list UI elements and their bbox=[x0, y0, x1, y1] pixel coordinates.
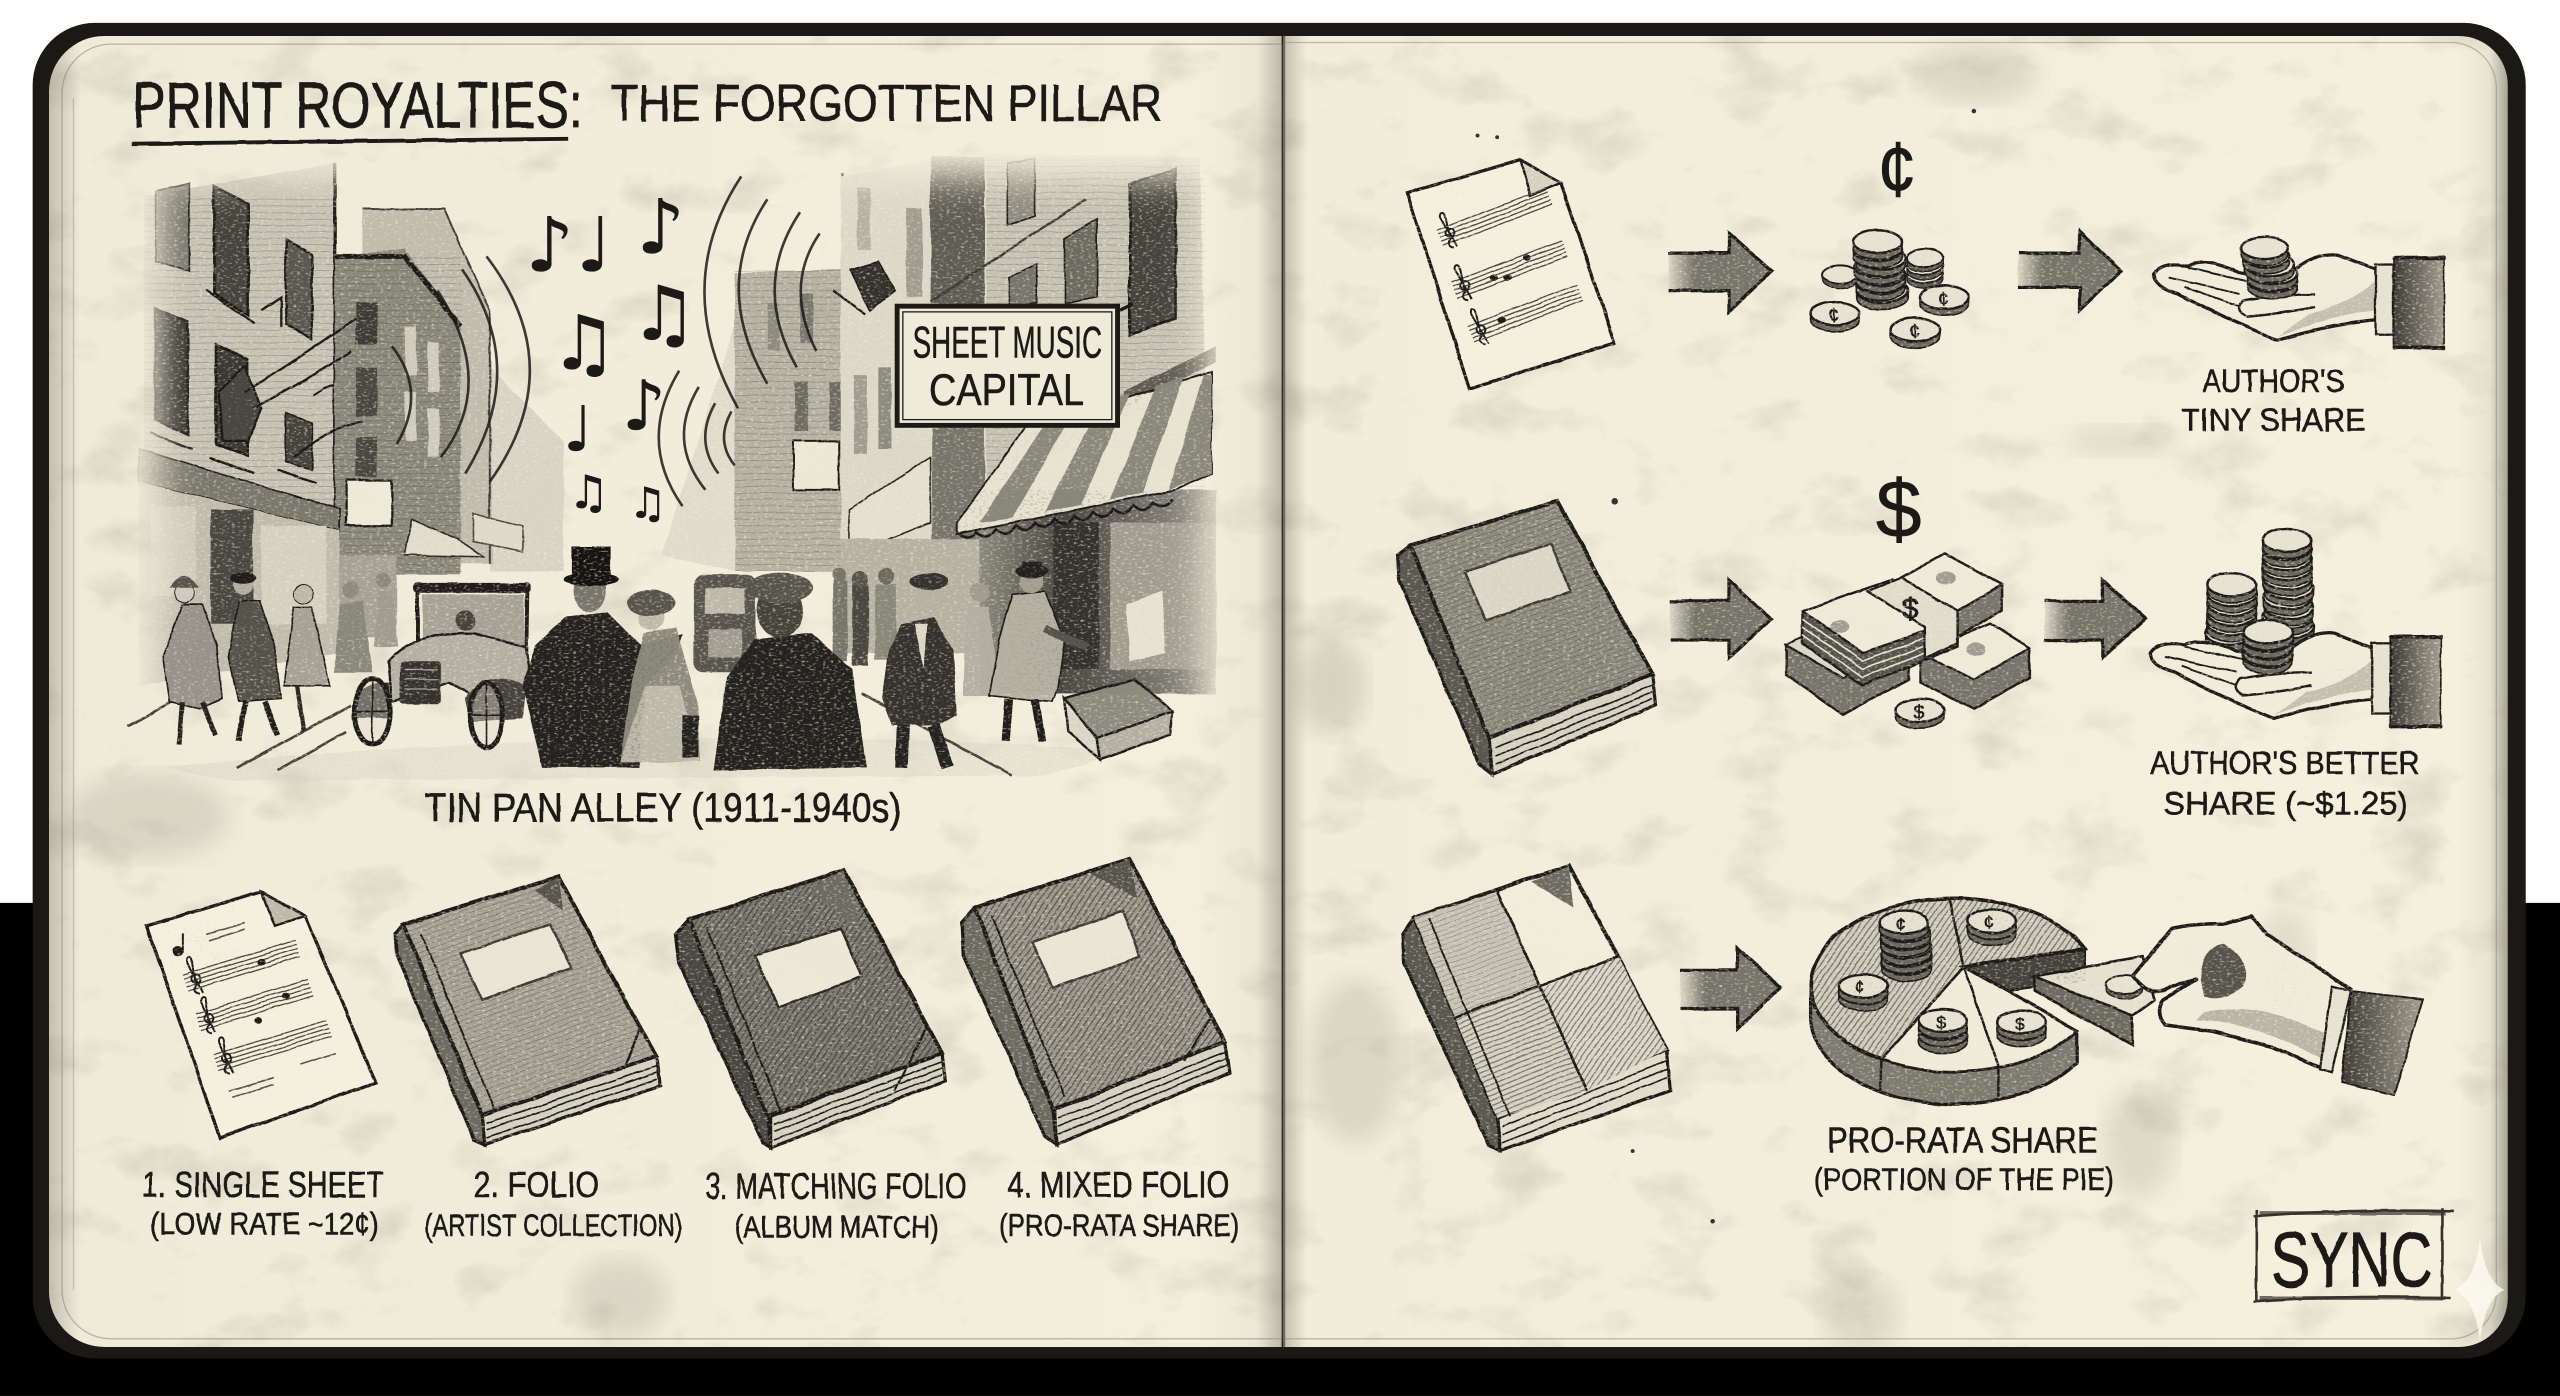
right page bbox=[1285, 36, 2508, 1347]
flow 2: folio to better share bbox=[1398, 464, 2442, 822]
labels: print types: (ARTIST COLLECTION) bbox=[424, 1208, 682, 1243]
street ground bbox=[127, 694, 1127, 780]
sound waves bbox=[392, 176, 820, 506]
icon: money stacks: $ bbox=[1902, 593, 1918, 626]
sign: Sheet Music Capital: SHEET MUSIC bbox=[913, 319, 1102, 368]
music notes: ♩ bbox=[576, 201, 612, 289]
sparkle watermark bbox=[2454, 1238, 2504, 1342]
black backdrop bbox=[0, 903, 2560, 1396]
left page bbox=[49, 36, 1282, 1347]
icon: money stacks bbox=[1786, 554, 2029, 715]
labels: print types: (PRO-RATA SHARE) bbox=[999, 1208, 1239, 1243]
labels: print types: 4. MIXED FOLIO bbox=[1007, 1164, 1229, 1205]
illustration: Tin Pan Alley street scene bbox=[127, 154, 1216, 780]
sign: Sheet Music Capital bbox=[895, 304, 1133, 428]
label: pro-rata share: (PORTION OF THE PIE) bbox=[1814, 1162, 2114, 1197]
music notes: ♫ bbox=[568, 466, 609, 519]
music notes: ♪ bbox=[526, 201, 574, 289]
label: author's better share bbox=[2150, 744, 2420, 822]
icon: folio book bbox=[395, 877, 660, 1145]
icon: single sheet bbox=[147, 891, 376, 1138]
icon: sheet music bbox=[1407, 160, 1615, 389]
icon: coin with dollar bbox=[1896, 699, 1944, 728]
pie coins: ¢ bbox=[1984, 911, 1994, 931]
arrow bbox=[2018, 232, 2121, 310]
vintage car bbox=[353, 583, 532, 748]
music notes bbox=[526, 183, 698, 529]
figure: suited man bbox=[882, 573, 957, 767]
icon: gramophone speaker left bbox=[219, 261, 895, 457]
arrow bbox=[1669, 234, 1771, 312]
crowd on the right bbox=[832, 567, 999, 696]
figure: man with cap bbox=[713, 573, 867, 771]
label: pro-rata share: PRO-RATA SHARE bbox=[1827, 1120, 2098, 1161]
icon: folio book bbox=[1398, 501, 1656, 774]
pie coins: $ bbox=[1936, 1013, 1946, 1033]
icon: coin with dollar: $ bbox=[1913, 701, 1924, 723]
label: pro-rata share bbox=[1814, 1120, 2114, 1197]
label: author's tiny share: AUTHOR'S bbox=[2202, 362, 2344, 399]
cent symbol: ¢ bbox=[1878, 125, 1917, 213]
music notes: ♫ bbox=[630, 270, 698, 358]
icon: hand with coins bbox=[2153, 237, 2446, 349]
crowd on the left bbox=[163, 572, 398, 745]
music notes: ♫ bbox=[629, 480, 667, 529]
pie coins: ¢ bbox=[1855, 977, 1865, 997]
figure: woman with hat bbox=[620, 589, 700, 762]
label: author's better share: AUTHOR'S BETTER bbox=[2150, 744, 2420, 781]
title: THE FORGOTTEN PILLAR bbox=[611, 75, 1162, 133]
street buildings bbox=[139, 154, 1216, 694]
figure: man in top hat bbox=[522, 547, 682, 767]
sign: Sheet Music Capital: CAPITAL bbox=[929, 366, 1084, 415]
labels: print types: 2. FOLIO bbox=[473, 1164, 599, 1205]
merchandise crate bbox=[1064, 679, 1172, 759]
label: author's tiny share bbox=[2181, 362, 2366, 438]
labels: print types: (ALBUM MATCH) bbox=[735, 1210, 939, 1245]
music notes: ♩ bbox=[563, 393, 593, 466]
coins: ¢ bbox=[1829, 305, 1839, 327]
chart: pie with coins and missing slice bbox=[1811, 898, 2085, 1104]
flow 1: sheet to tiny share bbox=[1407, 125, 2446, 438]
icon: hand with coin stacks bbox=[2150, 529, 2442, 728]
icon: mixed folio book bbox=[962, 859, 1229, 1145]
arrow bbox=[1680, 949, 1781, 1029]
label: author's tiny share: TINY SHARE bbox=[2181, 401, 2366, 438]
icon: matching folio book bbox=[676, 870, 945, 1148]
pie coins: $ bbox=[2015, 1014, 2025, 1034]
second car bbox=[694, 575, 756, 673]
coins: ¢ bbox=[1909, 321, 1919, 343]
coins: ¢ bbox=[1938, 288, 1949, 310]
flow 3: mixed folio to pro-rata share bbox=[1402, 865, 2423, 1197]
stamp: SYNC: SYNC bbox=[2271, 1216, 2433, 1304]
coins bbox=[1811, 230, 1969, 348]
pie coins bbox=[1838, 909, 2046, 1053]
music notes: ♫ bbox=[550, 299, 618, 387]
title bbox=[132, 68, 1162, 144]
dollar symbol: $ bbox=[1876, 464, 1922, 555]
labels: print types: 1. SINGLE SHEET bbox=[142, 1164, 384, 1205]
figure: trench coat man bbox=[989, 562, 1087, 741]
labels: print types: (LOW RATE ~12¢) bbox=[150, 1206, 379, 1241]
music notes: ♪ bbox=[622, 366, 666, 446]
music notes: ♪ bbox=[637, 183, 685, 271]
title: PRINT ROYALTIES: bbox=[132, 68, 583, 141]
icon: mixed folio book with quadrants bbox=[1402, 865, 1670, 1151]
arrow bbox=[1670, 580, 1771, 658]
arrow bbox=[2044, 580, 2145, 658]
gutter line bbox=[1283, 36, 1285, 1347]
labels: print types bbox=[142, 1164, 1239, 1245]
icon: hand pulling pie slice bbox=[2034, 916, 2423, 1096]
labels: print types: 3. MATCHING FOLIO bbox=[705, 1165, 967, 1206]
caption: Tin Pan Alley: TIN PAN ALLEY (1911-1940s) bbox=[424, 784, 901, 830]
pie coins: ¢ bbox=[1896, 915, 1905, 935]
striped awning bbox=[957, 372, 1211, 537]
label: author's better share: SHARE (~$1.25) bbox=[2163, 785, 2408, 822]
